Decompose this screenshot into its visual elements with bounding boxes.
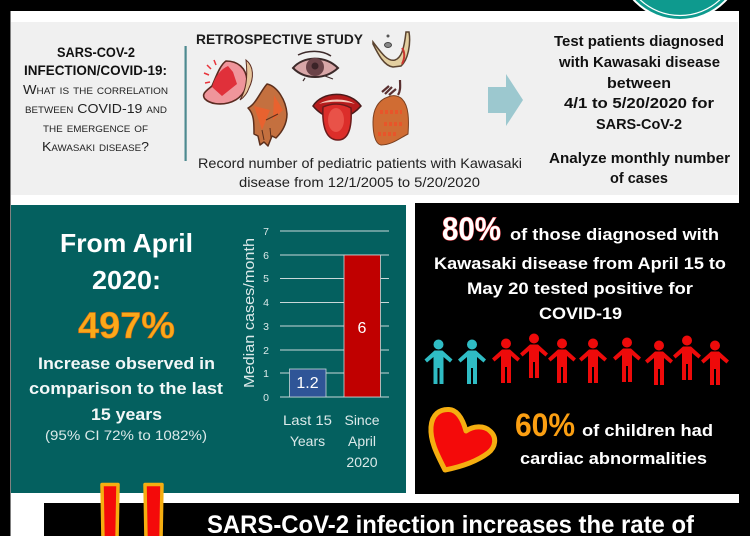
test patients text: SARS-CoV-2	[596, 116, 682, 133]
bar chart: median cases per month: 6	[263, 250, 269, 262]
heading: retrospective study: RETROSPECTIVE STUDY	[196, 31, 364, 47]
increase description: 15 years	[91, 405, 162, 424]
test patients text: with Kawasaki disease	[558, 54, 720, 71]
bar chart: median cases per month: 4	[263, 297, 269, 309]
record text: Record number of pediatric patients with Kawasaki	[198, 155, 522, 171]
x axis labels: Years	[290, 433, 325, 449]
research question text: What is the correlation	[23, 82, 168, 97]
panel: study design	[11, 22, 738, 195]
icon: red eye	[293, 51, 338, 81]
test patients text: 4/1 to 5/20/2020 for	[564, 95, 714, 112]
cardiac text	[520, 421, 713, 468]
icon: rash on back	[373, 80, 408, 145]
record text: disease from 12/1/2005 to 5/20/2020	[239, 174, 480, 190]
cardiac text: cardiac abnormalities	[520, 449, 707, 468]
increase description	[29, 354, 223, 443]
test patients text: of cases	[610, 170, 668, 187]
research question text: between COVID-19 and	[25, 101, 168, 116]
research question text: SARS-COV-2	[57, 45, 135, 60]
icon: exclamation marks	[102, 484, 162, 536]
bar chart: median cases per month: 3	[263, 321, 269, 333]
bar: since April 2020: 6	[358, 320, 367, 337]
increase description: Increase observed in	[38, 354, 215, 373]
research question text	[23, 45, 168, 154]
x axis labels: Since	[344, 412, 380, 428]
positivity text	[434, 225, 726, 323]
bar chart: median cases per month: 7	[263, 226, 269, 238]
research question text: Kawasaki disease?	[42, 139, 149, 154]
x axis labels	[283, 412, 380, 470]
positivity text: Kawasaki disease from April 15 to	[434, 254, 726, 273]
x axis labels: 2020	[346, 454, 378, 470]
heading: from April 2020: From April	[60, 228, 193, 258]
statistic: 80%: 80%	[442, 211, 501, 247]
bar: last 15 years: 1.2	[296, 375, 319, 392]
bar chart: median cases per month	[242, 226, 389, 470]
pictogram: 8 of 10 positive children	[492, 334, 729, 385]
x axis labels: Last 15	[283, 412, 332, 428]
pictogram: 2 of 10 negative children	[424, 340, 486, 384]
positivity text: May 20 tested positive for	[467, 279, 693, 298]
test patients text	[549, 33, 730, 187]
cardiac text: of children had	[582, 421, 713, 440]
statistic: 60%: 60%	[515, 407, 575, 443]
statistic: 497%: 497%	[78, 305, 175, 346]
bar chart: median cases per month: 5	[263, 273, 269, 285]
heading: from April 2020	[60, 228, 193, 295]
positivity text: COVID-19	[539, 304, 622, 323]
banner: conclusion	[44, 503, 750, 536]
bar chart: median cases per month: 1	[263, 368, 269, 380]
bar: last 15 years	[290, 369, 326, 397]
icon: red foot	[204, 60, 252, 104]
record text	[198, 155, 522, 190]
test patients text: between	[607, 75, 671, 92]
logo badge	[616, 0, 744, 21]
icon: heart	[431, 409, 495, 470]
heading: from April 2020: 2020:	[92, 265, 161, 295]
bar chart: median cases per month: 0	[263, 392, 269, 404]
research question text: the emergence of	[43, 120, 149, 135]
increase description: (95% CI 72% to 1082%)	[45, 428, 207, 443]
test patients text: Test patients diagnosed	[554, 33, 724, 50]
bar chart: median cases per month: 2	[263, 345, 269, 357]
research question text: INFECTION/COVID-19:	[24, 63, 167, 78]
icon: strawberry tongue	[313, 94, 361, 140]
increase description: comparison to the last	[29, 379, 223, 398]
arrow	[488, 74, 523, 126]
panel: 497 percent increase	[11, 205, 406, 493]
panel: COVID-19 positivity	[415, 203, 739, 494]
axis title: Median cases/month	[242, 238, 258, 388]
icon: swollen neck and mouth	[373, 32, 410, 67]
bar: since April 2020	[344, 255, 380, 397]
test patients text: Analyze monthly number	[549, 150, 730, 167]
x axis labels: April	[348, 433, 376, 449]
icon: red hand	[248, 84, 287, 146]
positivity text: of those diagnosed with	[510, 225, 719, 244]
